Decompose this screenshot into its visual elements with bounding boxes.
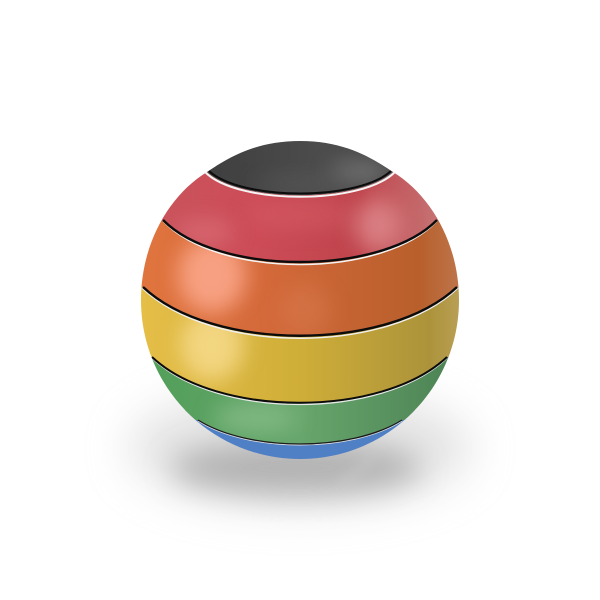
separator lines bbox=[142, 171, 458, 445]
band: dark cap bbox=[207, 141, 393, 196]
band: yellow bbox=[141, 287, 459, 402]
band: blue bbox=[185, 410, 415, 459]
infographic: striped sphere bbox=[125, 141, 476, 522]
band: green bbox=[152, 357, 448, 444]
sphere bbox=[141, 141, 459, 459]
ground shadow bbox=[128, 388, 472, 508]
band: orange bbox=[142, 220, 458, 334]
band: red bbox=[162, 172, 438, 261]
